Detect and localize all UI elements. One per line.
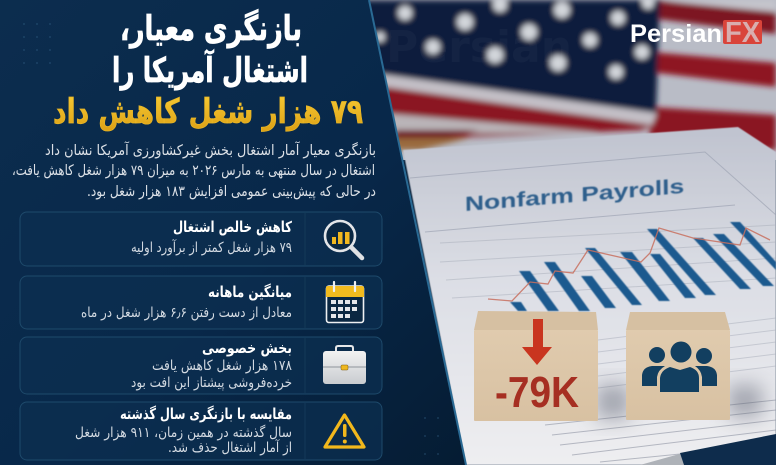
logo: PersianFX [630, 17, 762, 49]
title: white headline: بازنگری معیار، [120, 9, 302, 49]
wooden block: people [626, 312, 730, 420]
text: private sector detail: ۱۷۸ هزار شغل کاهش یافت [152, 358, 292, 374]
heading: comparison: مقایسه با بازنگری سال گذشته [120, 405, 292, 423]
text: comparison detail [75, 424, 292, 456]
title: white headline [112, 9, 308, 91]
title: white headline: اشتغال آمریکا را [112, 49, 308, 91]
card: comparison with last year's revision [20, 402, 382, 460]
heading: net job loss: کاهش خالص اشتغال [173, 218, 292, 236]
line chart: red trend line [488, 228, 770, 301]
text: comparison detail: سال گذشته در همین زمان، ۹۱۱ هزار شغل [75, 424, 292, 441]
heading: monthly average: میانگین ماهانه [208, 283, 292, 301]
bar chart: payroll bars [510, 222, 776, 311]
text: comparison detail: از آمار اشتغال حذف شد. [168, 439, 292, 456]
heading: private sector: بخش خصوصی [202, 339, 292, 357]
chart title: Nonfarm Payrolls: Nonfarm Payrolls [465, 176, 684, 216]
text block: intro paragraph: در حالی که پیش‌بینی عمومی افزایش ۱۸۳ هزار شغل بود. [87, 184, 376, 200]
icon: warning triangle [325, 415, 364, 447]
label: -79K: -79K [495, 368, 579, 417]
panel: left navy text panel [0, 0, 466, 465]
text block: intro paragraph: بازنگری معیار آمار اشتغال بخش غیرکشاورزی آمریکا نشان داد [45, 141, 376, 159]
card: private sector [20, 337, 382, 394]
icon: briefcase [323, 346, 366, 384]
photo: American flag backdrop [360, 0, 776, 160]
logo: PersianFX: Persian [630, 20, 722, 48]
icon: red down arrow [522, 319, 552, 365]
text: private sector detail: خرده‌فروشی پیشتاز این افت بود [131, 375, 292, 391]
logo: PersianFX: FX [725, 17, 761, 49]
text: monthly average detail: معادل از دست رفتن ۶٫۶ هزار شغل در ماه [81, 305, 292, 321]
wooden block: -79K [474, 311, 598, 421]
text: private sector detail [131, 358, 292, 391]
icon: people group [642, 342, 717, 392]
text block: intro paragraph: اشتغال در سال منتهی به مارس ۲۰۲۶ به میزان ۷۹ هزار شغل کاهش یافت، [12, 163, 375, 179]
text block: intro paragraph [12, 141, 376, 200]
card: monthly average [20, 276, 382, 329]
card: net job loss [20, 212, 382, 266]
text: net job loss detail: ۷۹ هزار شغل کمتر از برآورد اولیه [131, 239, 292, 256]
icon: magnifier with bars [325, 221, 362, 258]
icon: calendar [326, 282, 364, 322]
photo: lower documents and pen [545, 400, 776, 465]
block shadows [596, 385, 762, 419]
watermark: faint Persian wordmark: Persian [386, 22, 572, 73]
photo: report paper with chart [403, 127, 776, 465]
title: yellow highlight line: ۷۹ هزار شغل کاهش داد [53, 92, 363, 132]
